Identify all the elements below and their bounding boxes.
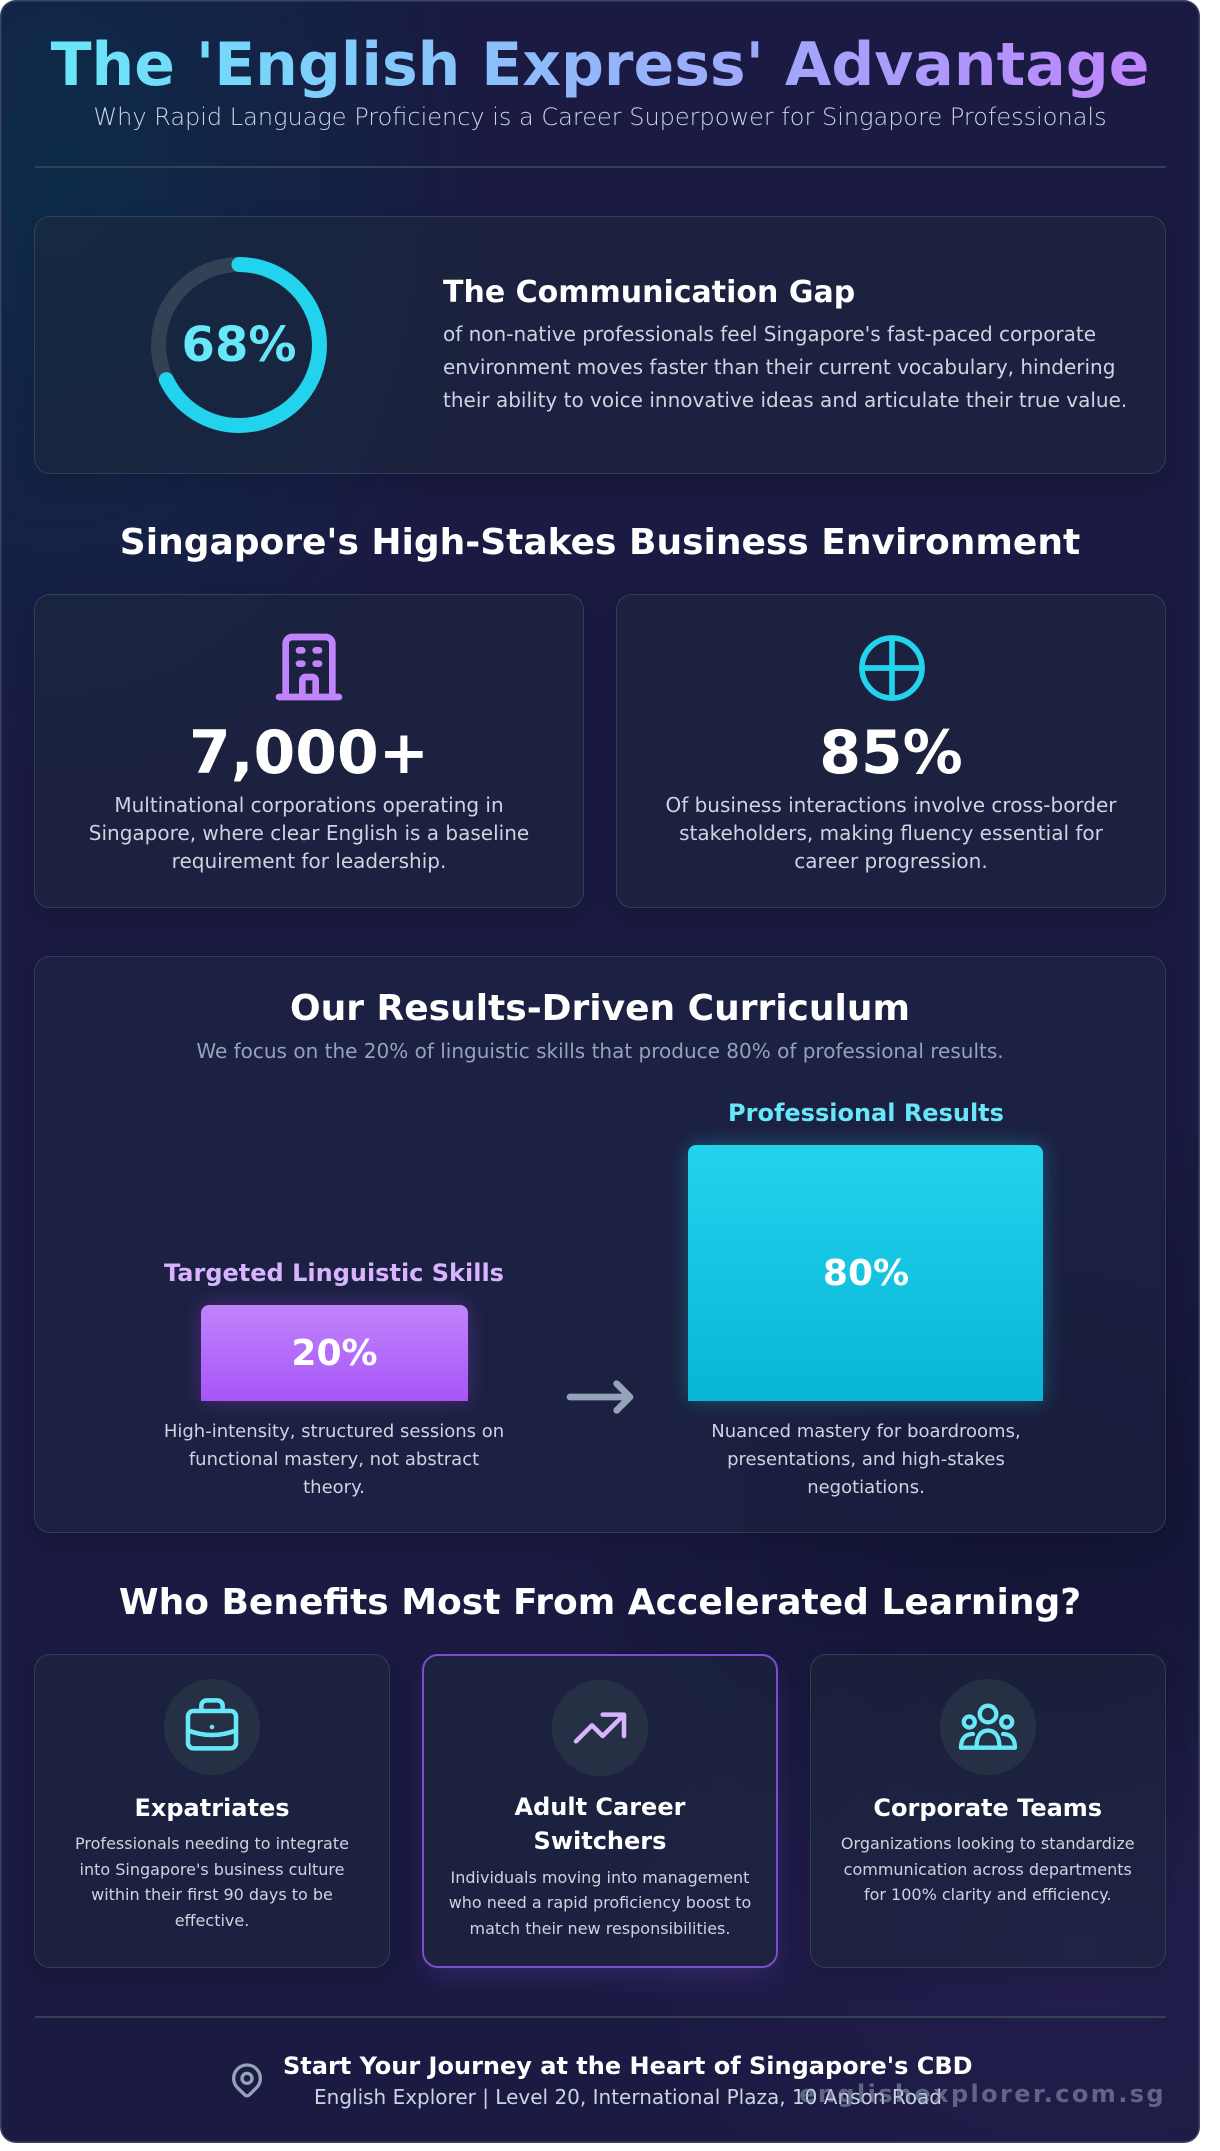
text: professional results description (711, 1421, 1021, 1498)
text: 85% description: Of business interactions involve cross-border (665, 793, 1117, 817)
heading: the communication gap: The Communication Gap (443, 274, 855, 310)
bar column: professional results (678, 1098, 1052, 1498)
text: corporate teams description (841, 1834, 1135, 1904)
text: expatriates description: effective. (175, 1911, 249, 1930)
watermark: website: englishexplorer.com.sg (799, 2080, 1166, 2108)
text: communication gap description (443, 322, 1127, 412)
panel: corporate teams (810, 1654, 1166, 1968)
icon: briefcase (164, 1679, 260, 1775)
stat: 7,000+: 7,000+ (189, 718, 429, 788)
text: professional results description: Nuanced mastery for boardrooms, (711, 1421, 1021, 1442)
text: corporate teams description: for 100% clarity and efficiency. (864, 1885, 1112, 1904)
text: professional results description: presentations, and high-stakes (727, 1449, 1005, 1470)
footer (232, 2052, 1166, 2109)
icon: trending up (552, 1680, 648, 1776)
text: switchers description: who need a rapid proficiency boost to (449, 1893, 751, 1912)
text: 7,000+ description: requirement for leadership. (172, 849, 446, 873)
bar: 20%: 20% (291, 1332, 378, 1374)
text: switchers description: match their new responsibilities. (470, 1919, 730, 1938)
label: targeted linguistic skills: Targeted Linguistic Skills (164, 1259, 504, 1287)
panel: curriculum (34, 956, 1166, 1533)
heading: curriculum: Our Results-Driven Curriculum (290, 988, 910, 1028)
text: expatriates description: into Singapore's business culture (80, 1860, 344, 1879)
text: corporate teams description: communication across departments (844, 1860, 1132, 1879)
icon: location pin (232, 2063, 262, 2098)
bar: 20% (200, 1305, 468, 1401)
text: targeted skills description (164, 1421, 504, 1498)
text: professional results description: negotiations. (807, 1477, 925, 1498)
arrow (566, 1380, 634, 1414)
donut chart: 68%: 68% (182, 317, 296, 373)
text: communication gap description: of non-native professionals feel Singapore's fast-paced corporate (443, 322, 1096, 346)
bar column: targeted skills (164, 1259, 504, 1498)
heading: footer call to action: Start Your Journey at the Heart of Singapore's CBD (283, 2052, 973, 2080)
heading: adult career switchers (514, 1793, 686, 1855)
panel: communication gap (34, 216, 1166, 474)
panel: adult career switchers (422, 1654, 778, 1968)
heading: adult career switchers: Switchers (534, 1827, 666, 1855)
panel: 7,000+ stat (34, 594, 584, 908)
text: expatriates description: Professionals needing to integrate (75, 1834, 349, 1853)
heading: corporate teams: Corporate Teams (873, 1794, 1102, 1822)
text: targeted skills description: functional mastery, not abstract (189, 1449, 479, 1470)
heading: expatriates: Expatriates (134, 1794, 290, 1822)
heading: adult career switchers: Adult Career (515, 1793, 685, 1821)
bar: 80%: 80% (823, 1252, 909, 1294)
text: targeted skills description: High-intensity, structured sessions on (164, 1421, 504, 1442)
panel: 85% stat (616, 594, 1166, 908)
text: targeted skills description: theory. (303, 1477, 365, 1498)
text: 85% description: stakeholders, making fluency essential for (679, 821, 1103, 845)
text: switchers description (449, 1868, 751, 1938)
text: 7,000+ description: Singapore, where clear English is a baseline (89, 821, 529, 845)
text: 85% description: career progression. (794, 849, 988, 873)
text: 7,000+ description (89, 793, 529, 873)
text: expatriates description (75, 1834, 349, 1930)
panel: expatriates (34, 1654, 390, 1968)
subtitle: Why Rapid Language Proficiency is a Career Superpower for Singapore Professionals (93, 102, 1107, 130)
bar: 80% (688, 1145, 1043, 1401)
heading: who benefits: Who Benefits Most From Accelerated Learning? (119, 1582, 1081, 1622)
stat: 85%: 85% (819, 718, 963, 788)
text: communication gap description: environment moves faster than their current vocabulary, hindering (443, 355, 1115, 379)
text: communication gap description: their ability to voice innovative ideas and articulate their true value. (443, 388, 1127, 412)
text: expatriates description: within their first 90 days to be (91, 1885, 333, 1904)
text: switchers description: Individuals moving into management (451, 1868, 749, 1886)
text: 7,000+ description: Multinational corporations operating in (114, 793, 504, 817)
donut chart: 68% (151, 257, 327, 433)
heading: business environment: Singapore's High-Stakes Business Environment (120, 522, 1080, 563)
icon: globe (859, 635, 925, 701)
icon: team (940, 1679, 1036, 1775)
label: professional results: Professional Results (728, 1098, 1004, 1126)
text: address: English Explorer | Level 20, International Plaza, 10 Anson Road (314, 2084, 942, 2108)
title: The 'English Express' Advantage (51, 30, 1149, 100)
text: 85% description (665, 793, 1117, 873)
text: curriculum subtitle: We focus on the 20% of linguistic skills that produce 80% of professional results. (196, 1039, 1004, 1063)
icon: building (276, 634, 342, 700)
text: corporate teams description: Organizations looking to standardize (841, 1834, 1135, 1853)
